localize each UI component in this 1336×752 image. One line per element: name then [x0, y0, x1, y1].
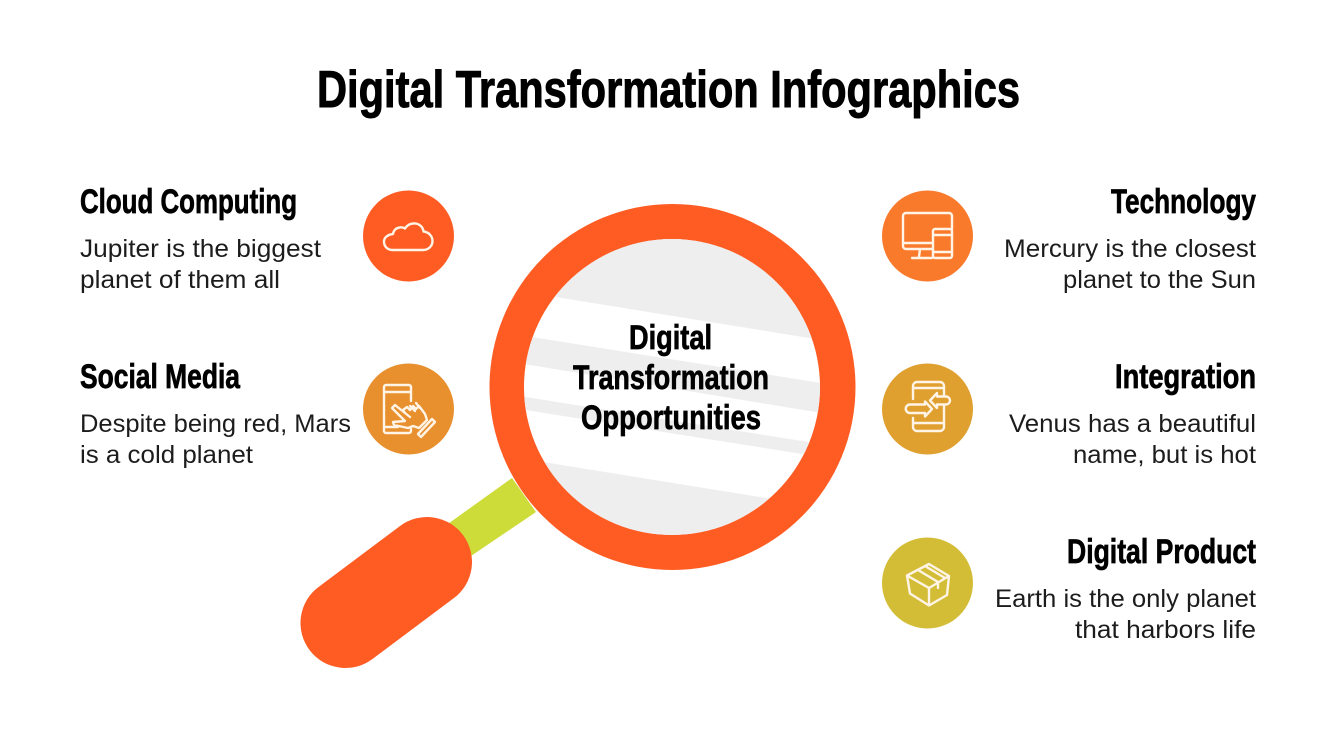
- magnifying glass: [346, 204, 856, 623]
- text: Integration description: Venus has a beautiful: [1009, 410, 1256, 438]
- text: Technology description: Mercury is the closest: [1004, 235, 1256, 263]
- text: Digital Product description: that harbors life: [1075, 616, 1256, 644]
- text: Cloud Computing description: Jupiter is the biggest: [80, 235, 321, 263]
- item: Digital Product: [882, 533, 1256, 644]
- title: Digital Transformation Infographics: [317, 61, 1020, 119]
- text: Social Media description: is a cold planet: [80, 441, 253, 469]
- text: Social Media description: [80, 410, 351, 469]
- item: Cloud Computing: [80, 183, 454, 294]
- text: Cloud Computing description: [80, 235, 321, 294]
- icon: cloud: [363, 190, 454, 282]
- text: Technology description: [1004, 235, 1256, 294]
- item: Social Media: [80, 358, 454, 469]
- text: Integration description: name, but is hot: [1073, 441, 1256, 469]
- magnifier centre label: Opportunities: [581, 399, 761, 437]
- heading: Social Media: Social Media: [80, 358, 241, 396]
- icon: phone with exchange arrows: [882, 364, 973, 454]
- text: Digital Product description: [995, 585, 1256, 644]
- magnifier handle grip: [346, 562, 427, 623]
- magnifier ring: [490, 204, 856, 570]
- magnifier centre label: Transformation: [573, 359, 769, 397]
- text: Integration description: [1009, 410, 1256, 469]
- heading: Integration: Integration: [1115, 358, 1256, 396]
- magnifier lens: [524, 239, 820, 535]
- heading: Technology: Technology: [1111, 183, 1256, 221]
- icon: box: [882, 538, 973, 628]
- magnifier centre label: Digital: [629, 319, 712, 357]
- item: Integration: [882, 358, 1256, 469]
- text: Technology description: planet to the Sun: [1063, 266, 1256, 294]
- text: Digital Product description: Earth is the only planet: [995, 585, 1256, 613]
- icon: monitor and devices: [882, 190, 973, 282]
- icon: phone with hand: [363, 364, 454, 454]
- text: Cloud Computing description: planet of them all: [80, 266, 280, 294]
- item: Technology: [882, 183, 1256, 294]
- magnifier centre label: [573, 319, 769, 437]
- magnifier handle stem: [445, 478, 536, 558]
- heading: Digital Product: Digital Product: [1067, 533, 1256, 571]
- text: Social Media description: Despite being red, Mars: [80, 410, 351, 438]
- heading: Cloud Computing: Cloud Computing: [80, 183, 297, 221]
